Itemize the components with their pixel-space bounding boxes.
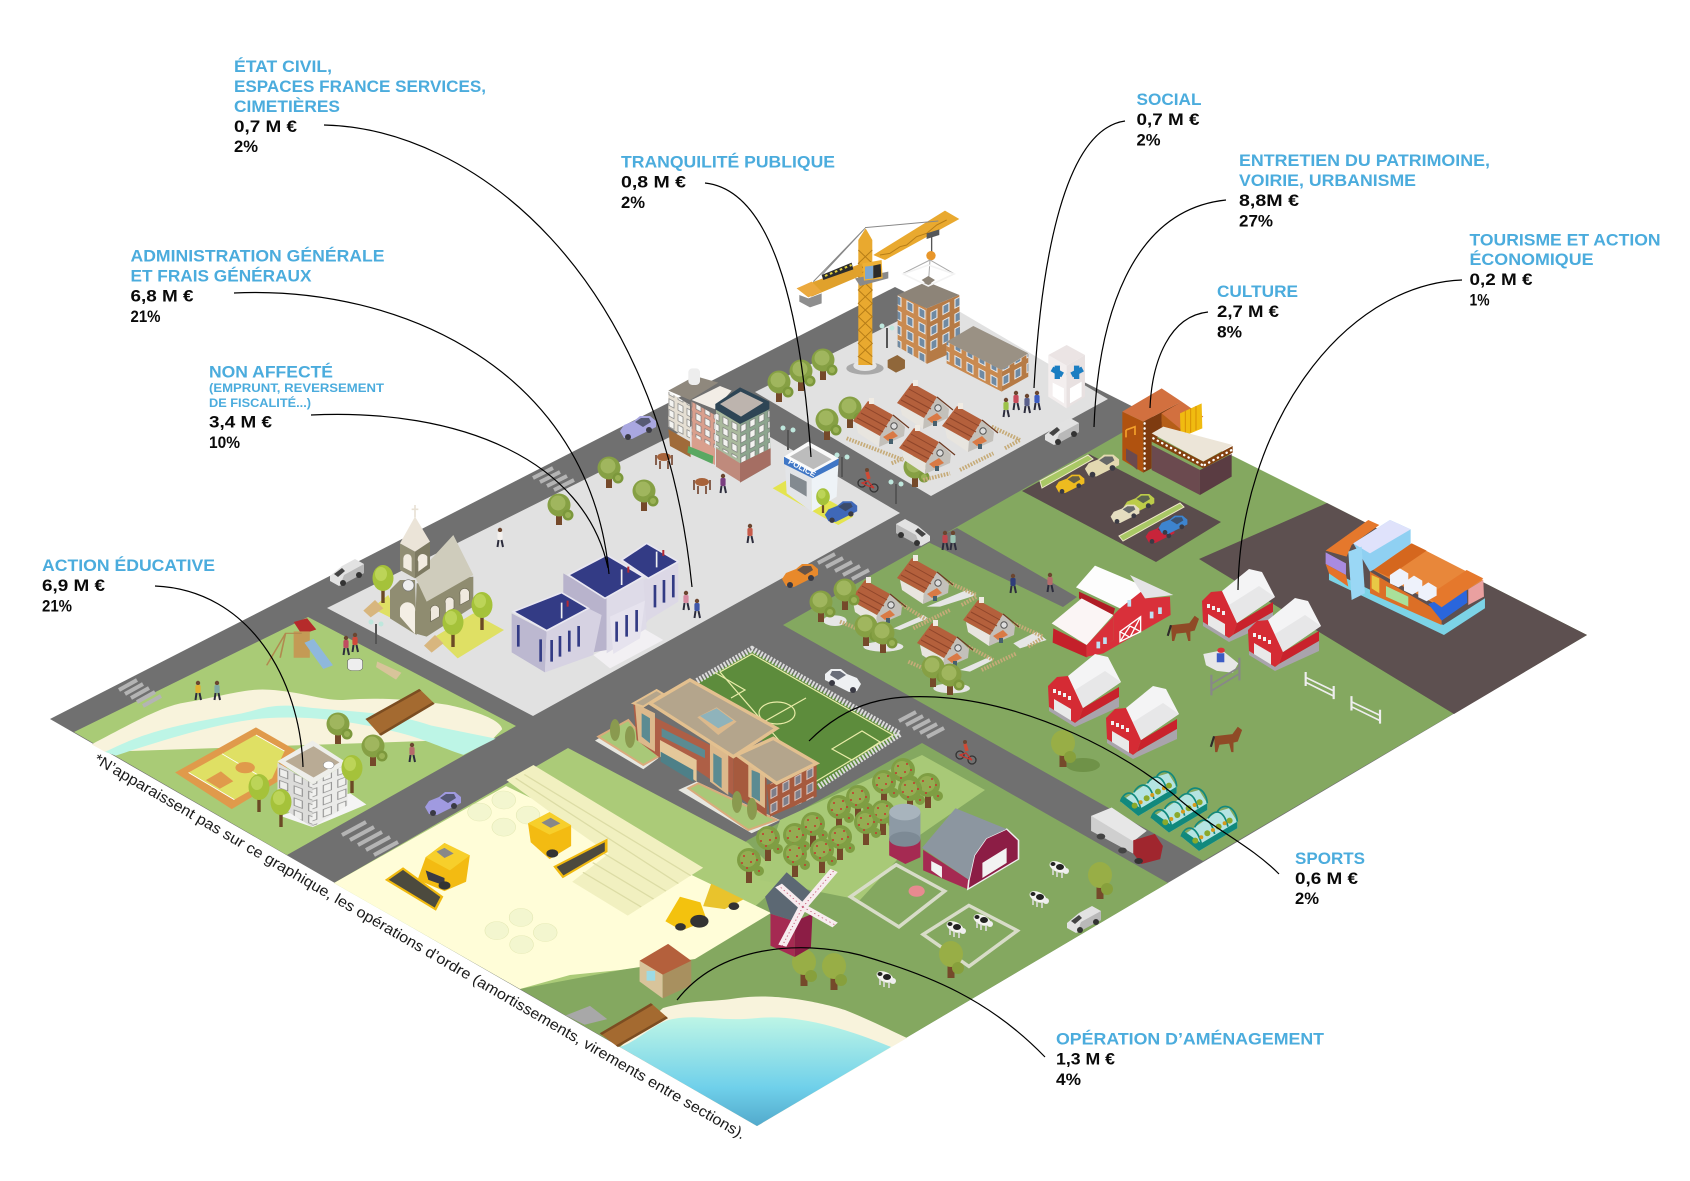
- callout: sports: 2%: [1295, 890, 1319, 908]
- callout: social: SOCIAL: [1136, 91, 1202, 109]
- callout: culture: CULTURE: [1217, 283, 1298, 301]
- police station: POLICE: [787, 457, 818, 479]
- horses and jump: [1168, 616, 1380, 752]
- lower residential houses: [850, 555, 1019, 669]
- playground: [267, 618, 333, 669]
- farm field tree: [1051, 730, 1100, 772]
- rock and lower bridge: [566, 1004, 667, 1046]
- leader: tourisme: [1238, 280, 1462, 590]
- stroller: [348, 659, 363, 671]
- block: light green fields: [334, 748, 785, 989]
- side road: [928, 528, 1077, 607]
- family: [1003, 391, 1040, 417]
- tourism mall: [1326, 520, 1485, 635]
- school: [595, 649, 900, 833]
- callout: tranquillité publique: TRANQUILITÉ PUBLIQUE: [621, 152, 835, 172]
- callout: non affecté: 3,4 M €: [209, 414, 272, 432]
- callout: opération d'aménagement: 4%: [1056, 1071, 1081, 1089]
- callout: administration générale: ADMINISTRATION GÉNÉRALE: [130, 246, 384, 266]
- callout: administration générale: 6,8 M €: [130, 288, 194, 306]
- wheat field and hay: [468, 765, 703, 954]
- leader: entretien du patrimoine: [1094, 200, 1226, 427]
- town hall: [512, 543, 678, 672]
- callout: entretien du patrimoine: VOIRIE, URBANISME: [1239, 172, 1416, 190]
- combine harvesters and tractor: [387, 812, 744, 931]
- callout: culture: [1217, 283, 1298, 342]
- school trees: [610, 719, 757, 820]
- block: right green area: [783, 414, 1587, 861]
- school lawns: [595, 720, 780, 833]
- callout: social: [1136, 91, 1202, 150]
- callout: état civil: 2%: [234, 138, 258, 156]
- silo and farm barn: [889, 804, 1018, 889]
- callout: tranquillité publique: 2%: [621, 194, 645, 212]
- leader: état civil: [324, 125, 692, 587]
- cafe tables: [656, 453, 710, 494]
- cows: [875, 859, 1069, 988]
- callout: action éducative: 21%: [42, 598, 72, 616]
- leader: tranquillité publique: [705, 183, 811, 457]
- park path and river: [74, 689, 502, 831]
- callout: état civil: ÉTAT CIVIL,: [234, 57, 332, 76]
- leader: action éducative: [155, 586, 303, 767]
- callout: tourisme: 1%: [1470, 292, 1490, 310]
- animal pens and animals: [850, 865, 1017, 966]
- park people: [195, 633, 415, 762]
- construction buildings: [888, 282, 1028, 392]
- block: farm green area: [520, 743, 1168, 1126]
- block: upper construction plaza: [755, 300, 1108, 496]
- park contents: [74, 618, 502, 831]
- callout: tourisme: TOURISME ET ACTION: [1470, 232, 1660, 250]
- basketball court: [175, 727, 295, 809]
- callout: administration générale: 21%: [130, 308, 161, 326]
- bench: [376, 662, 401, 680]
- tower crane: [797, 211, 959, 375]
- callout: état civil: 0,7 M €: [234, 118, 297, 136]
- vehicles on main roads: [330, 416, 1101, 933]
- lower residential trees: [810, 578, 964, 695]
- park trees: [248, 712, 388, 827]
- callout: social: 0,7 M €: [1136, 111, 1200, 129]
- callout: action éducative: [42, 556, 215, 616]
- block: crop field sand: [334, 786, 771, 989]
- callout: non affecté: (EMPRUNT, REVERSEMENT: [209, 383, 384, 395]
- callout: social: 2%: [1136, 132, 1161, 150]
- footnote: *N’apparaissent pas sur ce graphique, les opérations d’ordre (amortissements, virements entre sections).: [91, 751, 749, 1143]
- callout: action éducative: 6,9 M €: [42, 577, 105, 595]
- parking lot: [1022, 454, 1221, 562]
- callout: entretien du patrimoine: ENTRETIEN DU PATRIMOINE,: [1239, 152, 1490, 170]
- callout: état civil: ESPACES FRANCE SERVICES,: [234, 78, 486, 96]
- greenhouses: [1121, 771, 1237, 851]
- leader: non affecté: [311, 414, 608, 568]
- callout: tranquillité publique: 0,8 M €: [621, 174, 686, 192]
- lower residential yards and fences: [823, 582, 1047, 693]
- upper plaza trees: [768, 348, 930, 487]
- cyclists: [858, 468, 976, 764]
- callout: tourisme: ÉCONOMIQUE: [1470, 250, 1594, 269]
- callout: culture: 8%: [1217, 324, 1242, 342]
- pedestrians on side road: [1010, 573, 1053, 593]
- police tree and car: [816, 488, 857, 523]
- cabin: [640, 944, 691, 998]
- callout: opération d'aménagement: [1056, 1030, 1324, 1089]
- callout: état civil: CIMETIÈRES: [234, 97, 340, 116]
- callout: action éducative: ACTION ÉDUCATIVE: [42, 556, 215, 575]
- leader: social: [1034, 121, 1125, 388]
- street lamps: [368, 324, 904, 644]
- school walls: [633, 703, 733, 795]
- tourism dark lot: [1199, 503, 1587, 714]
- shops row: [668, 368, 771, 483]
- culture building: [1122, 388, 1233, 495]
- plaza trees: [548, 456, 658, 525]
- leader: sports: [809, 697, 1279, 874]
- callout: entretien du patrimoine: 8,8M €: [1239, 192, 1299, 210]
- callout: tourisme: 0,2 M €: [1470, 271, 1532, 289]
- callout: tranquillité publique: [621, 152, 835, 212]
- callout: administration générale: [130, 246, 384, 326]
- water and beach: [620, 996, 907, 1126]
- bridge: [366, 690, 434, 735]
- leader: opération d'aménagement: [677, 948, 1045, 1057]
- callout: tourisme: [1470, 232, 1660, 310]
- callout: administration générale: ET FRAIS GÉNÉRAUX: [130, 266, 312, 286]
- plaza people: [497, 474, 753, 618]
- orchard: [737, 758, 943, 883]
- residential houses upper: [847, 380, 1020, 480]
- leader: administration générale: [234, 292, 609, 574]
- farm trees: [792, 862, 1113, 990]
- orchard patch: [760, 755, 985, 900]
- callout: non affecté: 10%: [209, 434, 240, 452]
- callout: entretien du patrimoine: [1239, 152, 1490, 230]
- callout: non affecté: DE FISCALITÉ...): [209, 397, 311, 410]
- callout: sports: 0,6 M €: [1295, 870, 1358, 888]
- callout: sports: [1295, 850, 1365, 908]
- police station: [773, 442, 853, 525]
- administrative building: éducation: [277, 741, 366, 827]
- callout: non affecté: NON AFFECTÉ: [209, 362, 333, 382]
- truck: [1091, 808, 1163, 864]
- map ground: isometric territory: [50, 287, 1587, 1126]
- small red barns: [1048, 569, 1321, 759]
- windmill: [765, 870, 835, 957]
- callout: sports: SPORTS: [1295, 850, 1365, 868]
- callout: opération d'aménagement: 1,3 M €: [1056, 1050, 1115, 1068]
- medical kiosk: [1048, 345, 1085, 408]
- crosswalks: [119, 468, 944, 855]
- church: [363, 505, 504, 658]
- callout: état civil: [234, 57, 486, 156]
- callout: non affecté: [209, 362, 384, 452]
- leader: culture: [1150, 312, 1208, 408]
- school roofs: [650, 680, 777, 757]
- block: park: [74, 617, 516, 855]
- callout: entretien du patrimoine: 27%: [1239, 212, 1273, 230]
- callout: opération d'aménagement: OPÉRATION D’AMÉNAGEMENT: [1056, 1030, 1324, 1048]
- large red barn: [1052, 566, 1173, 657]
- block: central plaza: [327, 410, 900, 716]
- church trees: [372, 565, 492, 647]
- parking: [1040, 455, 1187, 544]
- football field: [697, 649, 900, 790]
- seniors: [942, 531, 956, 550]
- callout: culture: 2,7 M €: [1217, 303, 1279, 321]
